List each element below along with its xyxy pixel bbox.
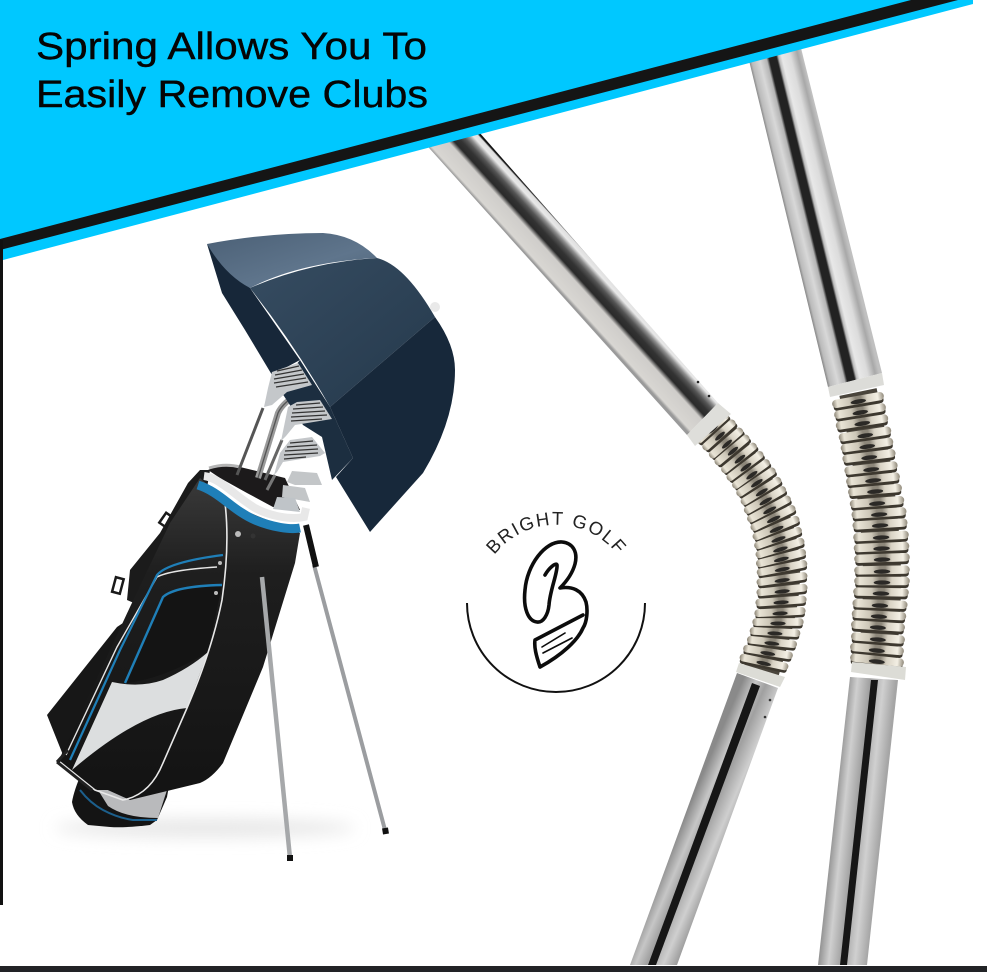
banner title: Spring Allows You To — [36, 26, 427, 68]
lower right shaft dark stripe — [840, 680, 878, 965]
bag shoulder strap — [127, 470, 210, 610]
golf club shafts — [237, 393, 300, 490]
bottom page border — [0, 966, 987, 972]
right spring upper collar — [828, 373, 884, 397]
logo name: BRIGHT GOLF — [486, 512, 626, 554]
bag base gray trim — [98, 790, 167, 818]
left spring upper collar — [687, 403, 731, 446]
logo monogram — [525, 542, 587, 667]
bag back pocket — [47, 623, 140, 770]
right club shaft and spring — [746, 36, 910, 965]
umbrella middle panel — [250, 258, 435, 407]
umbrella light panel — [207, 233, 377, 288]
bag main body — [58, 478, 300, 800]
strap buckles — [112, 513, 174, 594]
golf bag with umbrella — [47, 233, 455, 861]
ground shadow — [55, 819, 355, 837]
left stand leg — [262, 577, 290, 861]
lower left shaft — [630, 673, 778, 965]
left club shaft and spring — [412, 115, 808, 965]
bag rivets — [214, 531, 256, 595]
umbrella underside — [207, 244, 300, 375]
white swoosh panel — [72, 652, 208, 770]
right spring lower collar — [851, 662, 906, 680]
black diagonal band — [0, 0, 958, 250]
right stand leg — [306, 525, 386, 834]
inner rim — [209, 465, 240, 468]
logo arc — [467, 603, 645, 692]
Bright Golf logo — [466, 512, 646, 693]
umbrella tip — [430, 302, 440, 312]
cyan banner stripe — [0, 0, 973, 260]
lower left shaft dark stripe — [648, 683, 760, 965]
umbrella — [207, 233, 455, 532]
right spring coil — [831, 391, 910, 670]
left spring coil — [694, 411, 808, 673]
club heads — [264, 363, 332, 512]
umbrella dark panel — [330, 317, 455, 532]
logo text path — [494, 525, 620, 558]
bag pocket panel — [127, 585, 222, 683]
lower right shaft — [818, 677, 898, 965]
upper left shaft — [412, 115, 718, 435]
bag base blue trim — [80, 790, 157, 820]
bag base — [72, 772, 170, 827]
bag rim — [198, 476, 306, 529]
bag piping and zippers — [57, 503, 227, 800]
banner title — [36, 26, 428, 116]
banner title: Easily Remove Clubs — [36, 74, 428, 116]
left page border — [0, 240, 3, 905]
bag opening — [208, 466, 300, 510]
banner — [0, 0, 973, 260]
left spring lower collar — [736, 663, 785, 687]
upper right shaft — [746, 36, 882, 387]
